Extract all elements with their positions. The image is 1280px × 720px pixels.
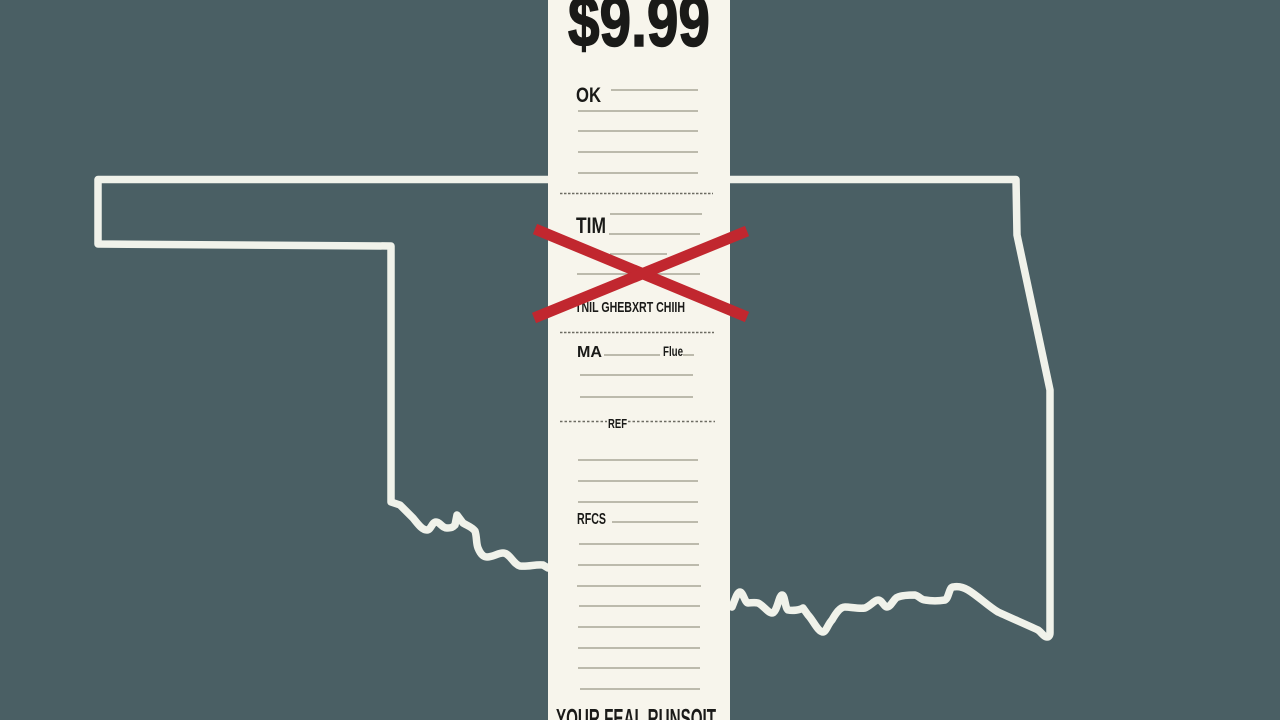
receipt xyxy=(548,0,730,720)
section: TIM lines xyxy=(577,214,702,274)
label: MA: MA xyxy=(577,344,602,361)
map: Oklahoma state outline xyxy=(98,180,1050,637)
divider 1 xyxy=(560,192,713,194)
section: MA lines xyxy=(580,355,694,397)
label: total line: TNIL GHEBXRT CHIIH xyxy=(575,299,685,316)
section: RFCS lines xyxy=(577,522,701,689)
divider 3 xyxy=(560,420,715,422)
receipt paper xyxy=(548,0,730,720)
label: RFCS: RFCS xyxy=(577,511,606,528)
section: REF lines xyxy=(578,460,698,502)
label: Flue: Flue xyxy=(663,343,683,359)
icon: red X xyxy=(534,229,747,318)
label: TIM: TIM xyxy=(576,213,606,238)
section: OK lines xyxy=(578,90,698,173)
label: REF: REF xyxy=(608,416,627,431)
divider 2 xyxy=(560,332,714,334)
label: OK: OK xyxy=(576,84,601,107)
